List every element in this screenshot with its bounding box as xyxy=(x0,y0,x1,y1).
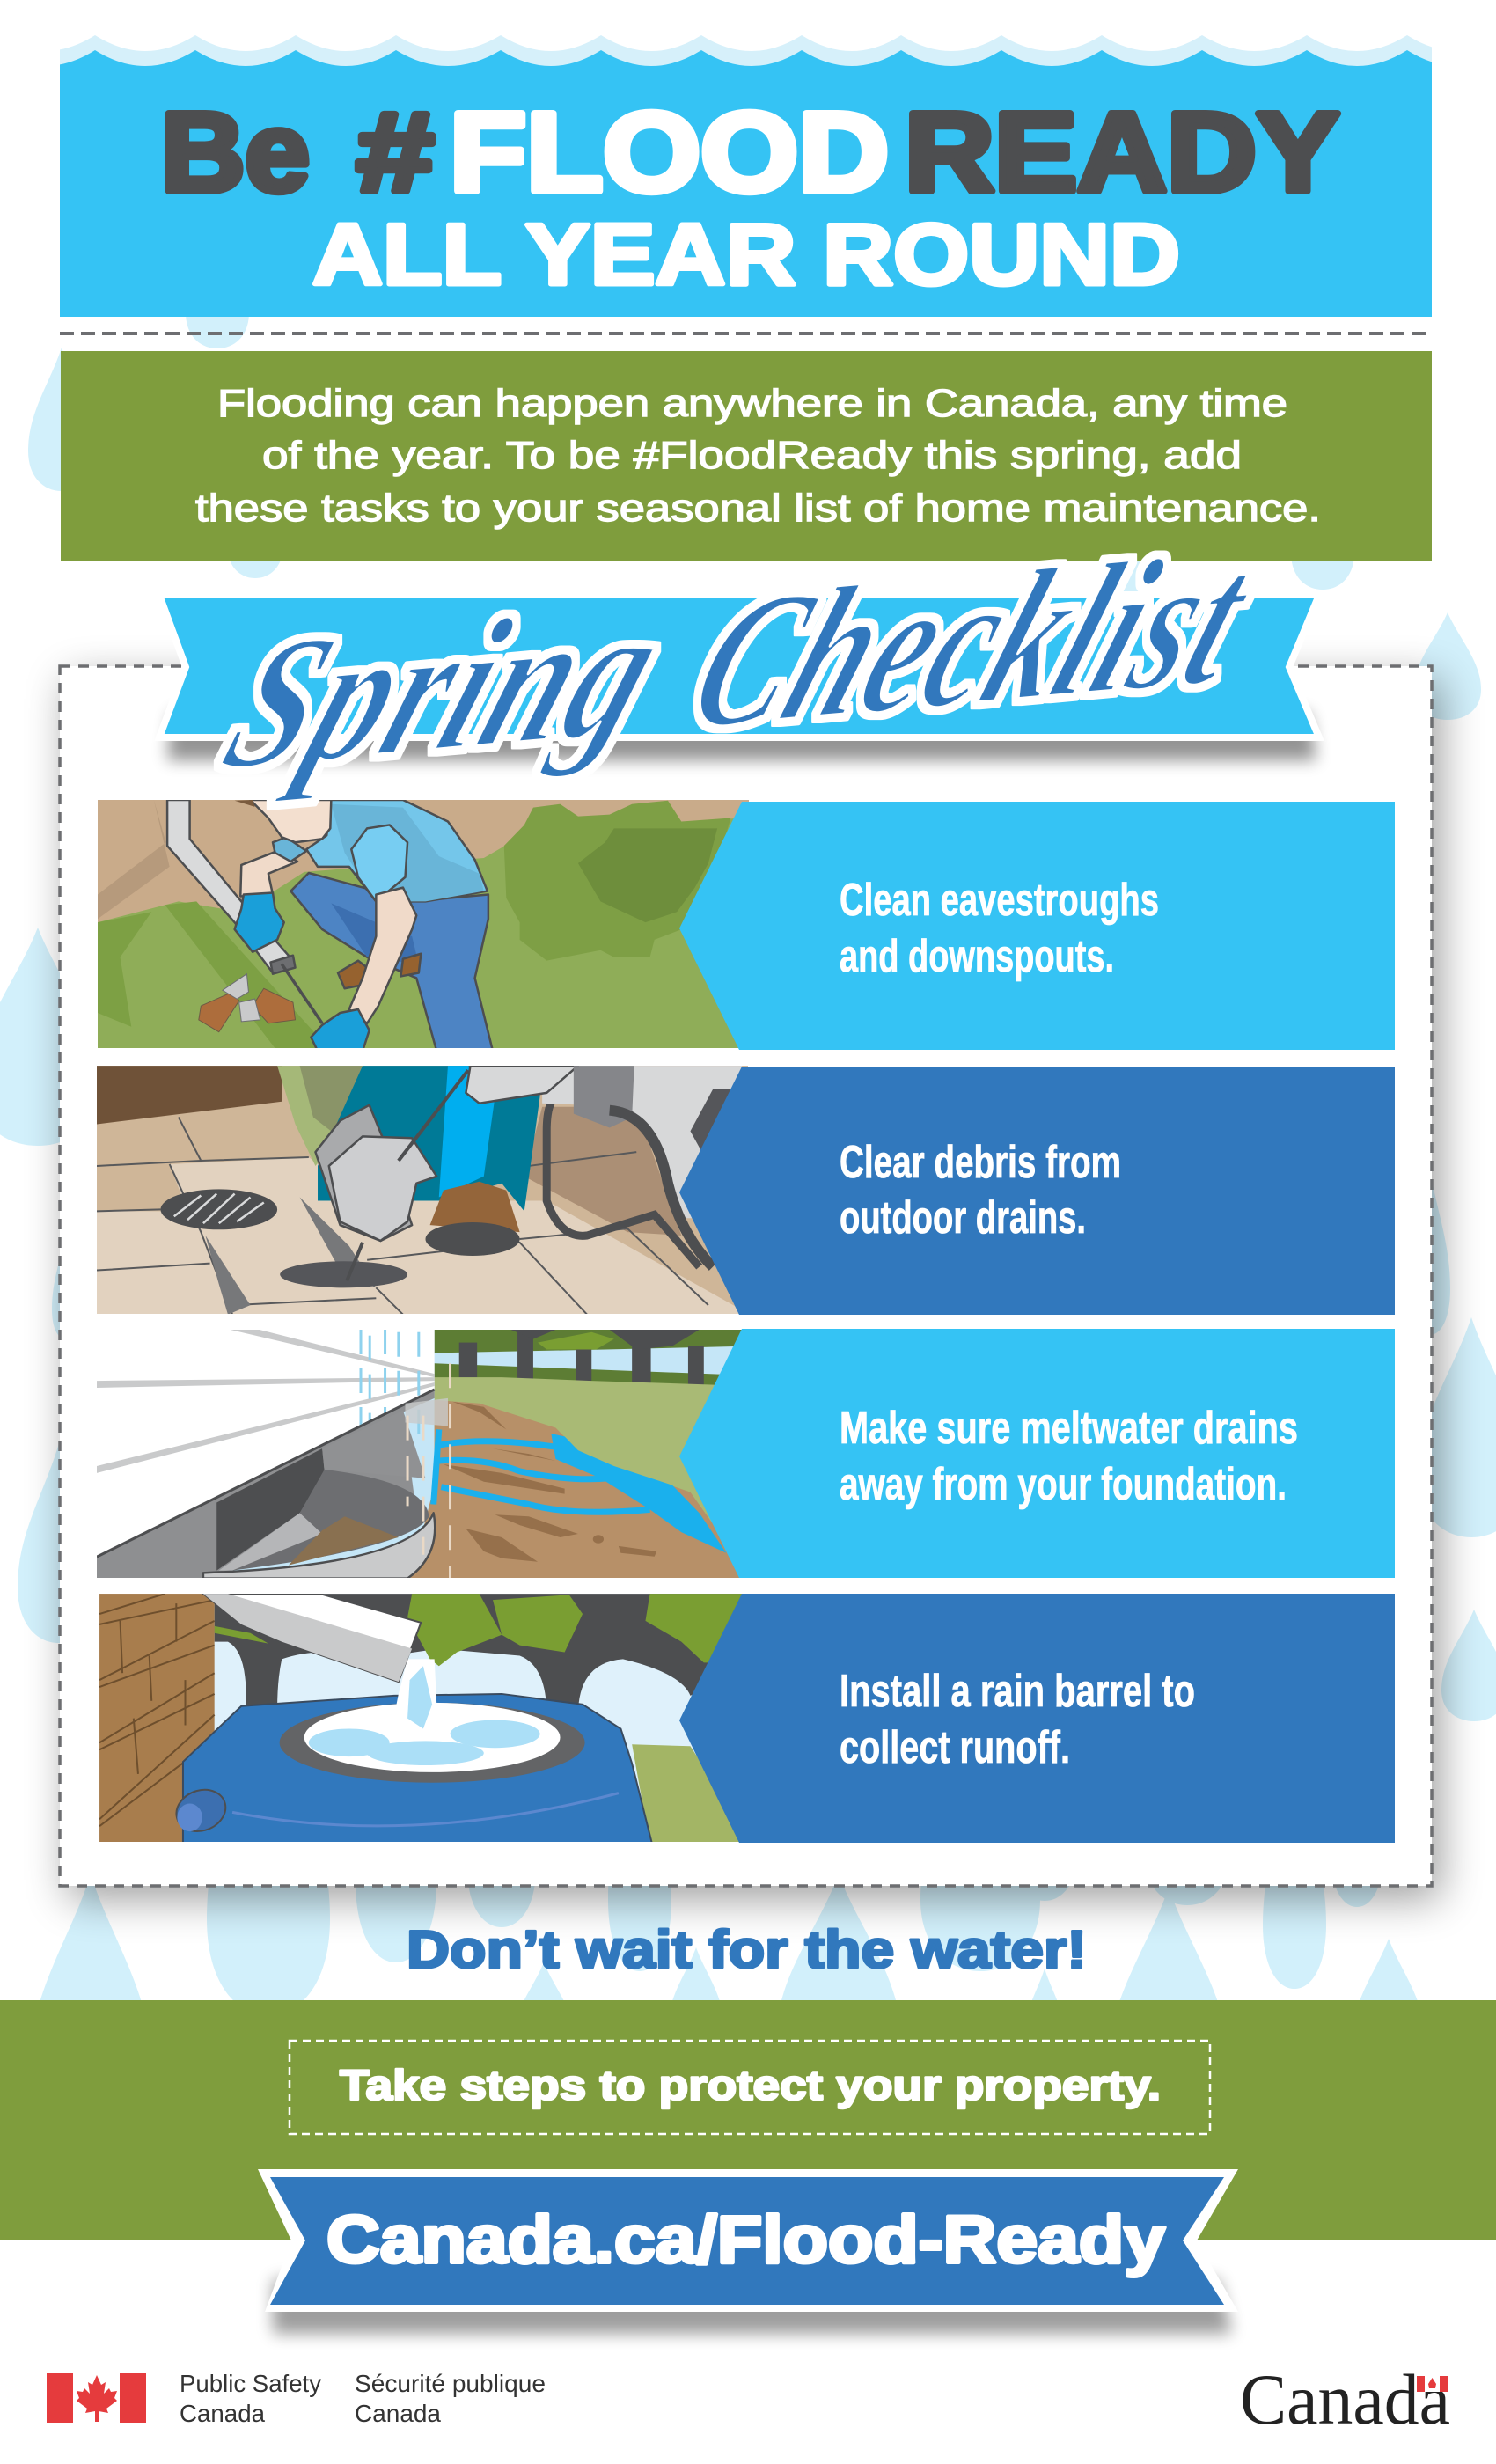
illustration: rain barrel xyxy=(97,1594,753,1844)
step 3 text: Make sure meltwater drains xyxy=(840,1403,1298,1454)
illustration: cleaning a downspout xyxy=(97,797,752,1051)
URL ribbon shadow xyxy=(273,2279,1232,2334)
step 1 text xyxy=(840,875,1159,982)
title: Be #FLOODREADY: # xyxy=(356,90,434,216)
Government of Canada signature flag xyxy=(47,2373,146,2423)
tagline: Don’t wait for the water! xyxy=(407,1920,1087,1979)
step 3 text xyxy=(840,1403,1298,1510)
step 3 arrow panel xyxy=(679,1329,1395,1578)
step 4 text xyxy=(840,1666,1195,1773)
step 1 text: Clean eavestroughs xyxy=(840,875,1159,926)
background water droplets xyxy=(0,220,1496,2138)
spring checklist ribbon shadow xyxy=(167,713,1316,760)
title: Be #FLOODREADY xyxy=(161,90,1339,216)
checklist panel xyxy=(60,666,1432,1886)
step 3 text: away from your foundation. xyxy=(840,1459,1287,1510)
department name: Public Safety xyxy=(180,2370,321,2397)
department name: Sécurité publique xyxy=(355,2370,546,2397)
intro text: of the year. To be #FloodReady this spring, add xyxy=(262,434,1242,477)
department name xyxy=(180,2370,546,2427)
subtitle: ALL YEAR ROUND: ALL YEAR ROUND xyxy=(312,206,1180,303)
illustration: meltwater away from foundation xyxy=(97,1329,753,1580)
URL ribbon xyxy=(258,2169,1238,2312)
intro text: these tasks to your seasonal list of home maintenance. xyxy=(195,487,1321,530)
step 1 text: and downspouts. xyxy=(840,931,1114,982)
heading: Spring Checklist: Spring xyxy=(201,565,689,810)
callout text: Take steps to protect your property. xyxy=(340,2063,1161,2109)
department name: Canada xyxy=(180,2400,265,2427)
title: Be #FLOODREADY: READY xyxy=(905,90,1339,216)
title: Be #FLOODREADY: Be xyxy=(161,90,310,216)
URL text: Canada.ca/Flood-Ready xyxy=(326,2203,1165,2277)
step 2 text xyxy=(840,1137,1121,1243)
step 4 arrow panel xyxy=(679,1594,1395,1843)
illustration: clearing a drain xyxy=(97,1066,753,1316)
dashed divider xyxy=(60,332,1432,335)
header panel with waves xyxy=(0,35,1496,317)
step 2 text: Clear debris from xyxy=(840,1137,1121,1188)
intro text xyxy=(195,382,1321,530)
checklist panel shadow xyxy=(68,679,1441,1899)
intro panel xyxy=(61,351,1432,561)
department name: Canada xyxy=(355,2400,441,2427)
intro text: Flooding can happen anywhere in Canada, any time xyxy=(217,382,1287,425)
step 1 arrow panel xyxy=(679,802,1395,1050)
Canada wordmark: Canada xyxy=(1240,2359,1450,2439)
step 2 arrow panel xyxy=(679,1067,1395,1315)
title: Be #FLOODREADY: FLOOD xyxy=(450,90,889,216)
dashed callout xyxy=(290,2041,1210,2134)
step 4 text: collect runoff. xyxy=(840,1722,1070,1773)
heading: Spring Checklist: Checklist xyxy=(666,510,1280,771)
wordmark flag xyxy=(1417,2376,1448,2392)
step 2 text: outdoor drains. xyxy=(840,1192,1086,1243)
green call-to-action band xyxy=(0,2000,1496,2240)
step 4 text: Install a rain barrel to xyxy=(840,1666,1195,1717)
spring checklist ribbon xyxy=(159,595,1319,737)
heading: Spring Checklist xyxy=(201,510,1280,810)
